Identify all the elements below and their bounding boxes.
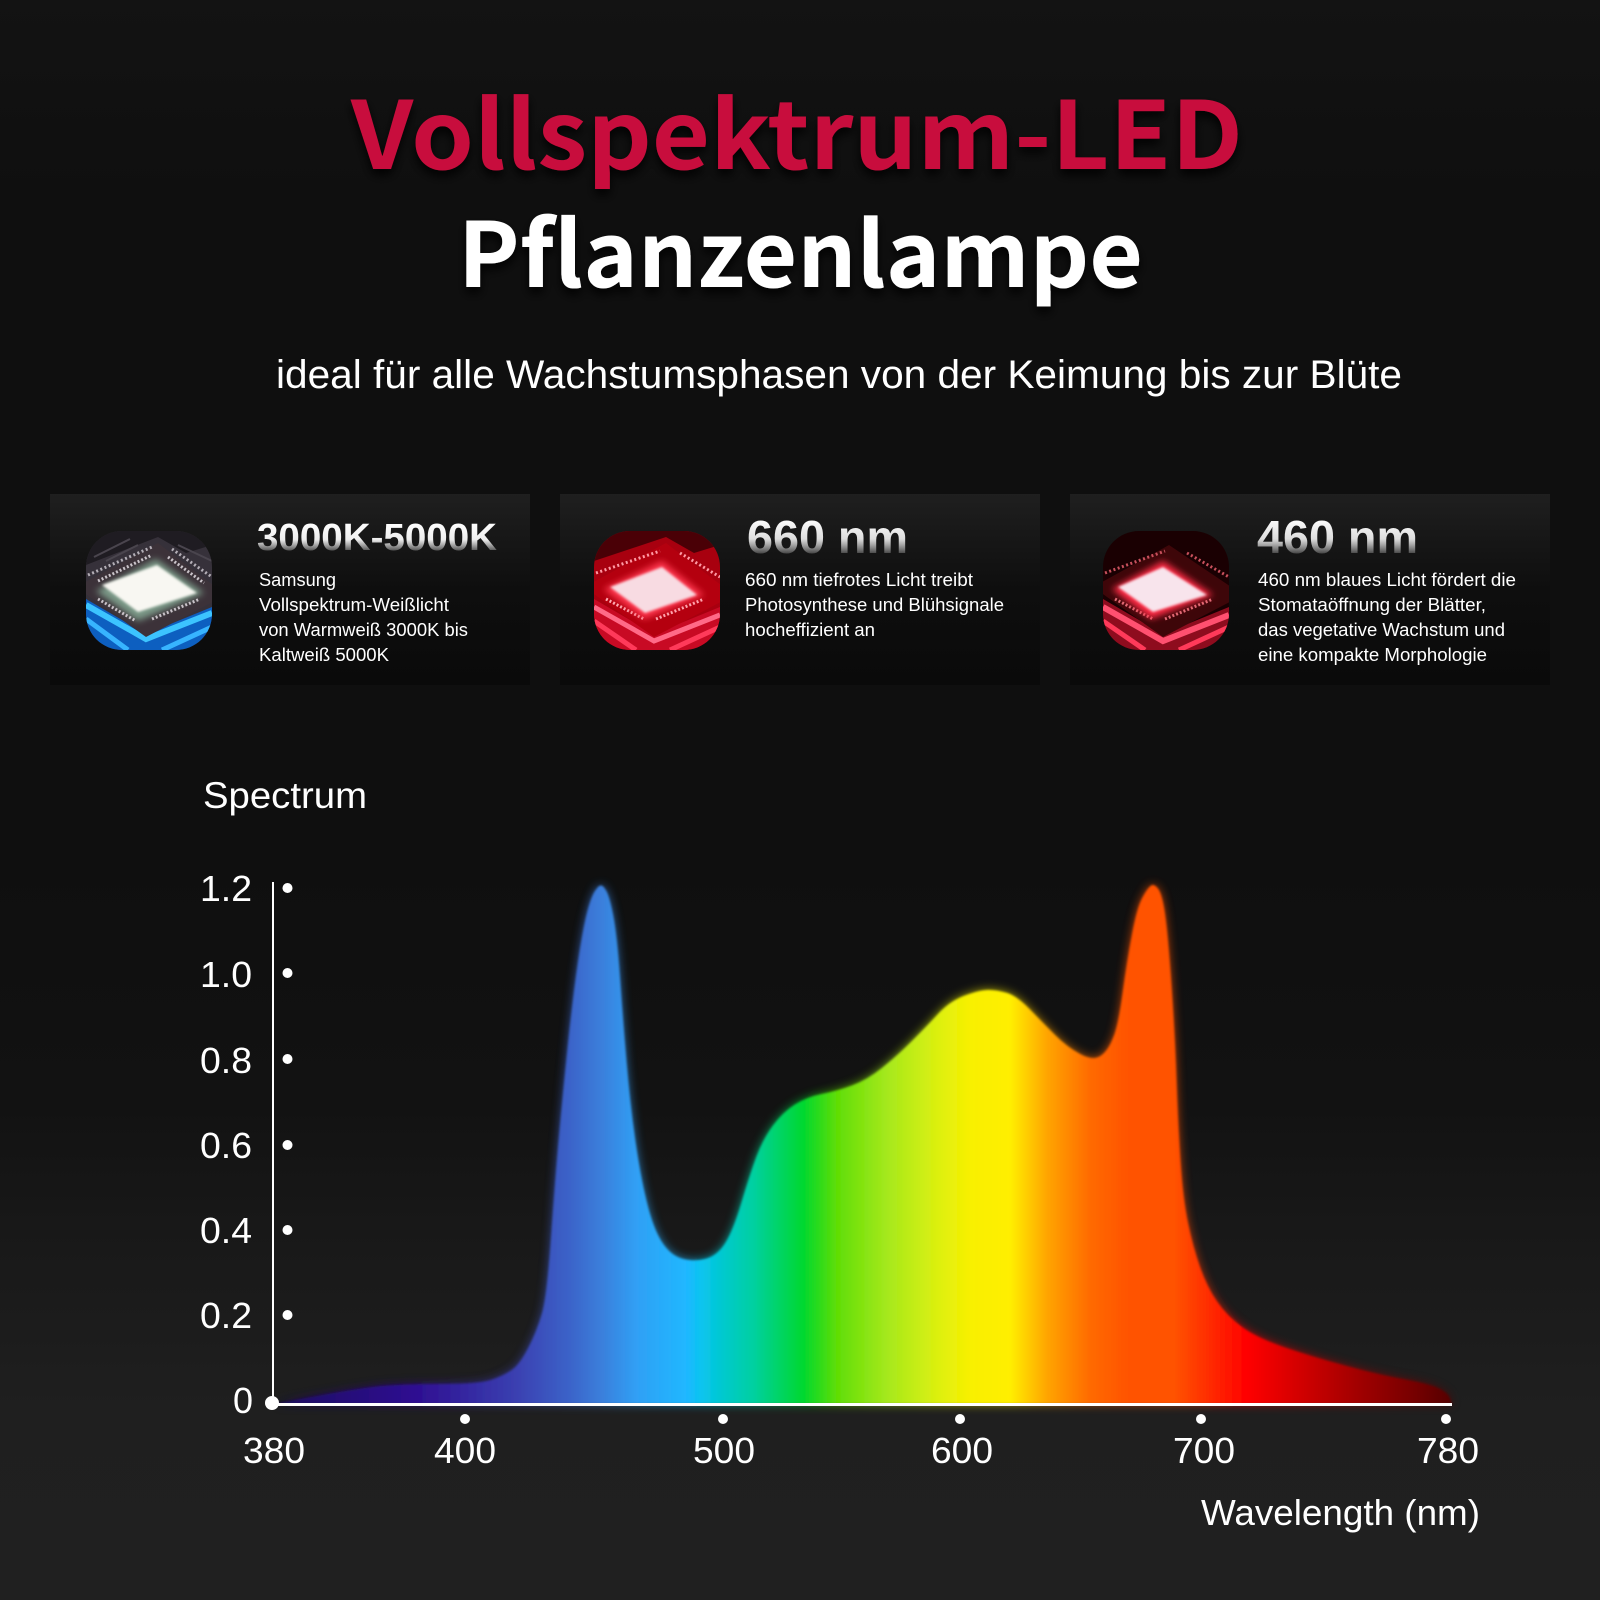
x-axis labels: 400 bbox=[434, 1430, 496, 1471]
spectrum curve bbox=[274, 885, 1452, 1404]
description: Photosynthese und Blühsignale bbox=[745, 594, 1004, 615]
x-axis labels: 700 bbox=[1173, 1430, 1235, 1471]
description: Stomataöffnung der Blätter, bbox=[1258, 594, 1486, 615]
icon: white LED chip bbox=[86, 531, 212, 650]
axes bbox=[265, 882, 1452, 1410]
y-axis labels: 0.8 bbox=[200, 1040, 252, 1081]
heading: 660 nm bbox=[747, 511, 908, 563]
y-axis ticks bbox=[282, 883, 292, 1320]
y-axis title: Spectrum bbox=[203, 775, 367, 816]
x-axis labels: 500 bbox=[693, 1430, 755, 1471]
description: Samsung bbox=[259, 569, 336, 590]
description: das vegetative Wachstum und bbox=[1258, 619, 1505, 640]
description bbox=[259, 569, 468, 665]
description: eine kompakte Morphologie bbox=[1258, 644, 1487, 665]
heading: 3000K-5000K bbox=[257, 517, 498, 559]
description: hocheffizient an bbox=[745, 619, 875, 640]
y-axis labels bbox=[200, 868, 253, 1421]
x-axis ticks bbox=[460, 1414, 1451, 1424]
description bbox=[745, 569, 1004, 640]
y-axis labels: 1.2 bbox=[200, 868, 252, 909]
description: Kaltweiß 5000K bbox=[259, 644, 390, 665]
description: Vollspektrum-Weißlicht bbox=[259, 594, 449, 615]
icon: red-lit LED chip bbox=[1103, 531, 1229, 650]
panel: 3000K-5000K bbox=[50, 494, 530, 661]
title bbox=[350, 61, 1243, 313]
icon: red LED chip bbox=[594, 531, 720, 650]
chart: spectrum bbox=[200, 775, 1480, 1533]
subtitle: ideal für alle Wachstumsphasen von der Keimung bis zur Blüte bbox=[276, 353, 1402, 397]
x-axis labels: 380 bbox=[243, 1430, 305, 1471]
title: Pflanzenlampe bbox=[458, 183, 1143, 313]
description: von Warmweiß 3000K bis bbox=[259, 619, 468, 640]
y-axis labels: 0.2 bbox=[200, 1295, 252, 1336]
x-axis labels: 780 bbox=[1417, 1430, 1479, 1471]
description: 660 nm tiefrotes Licht treibt bbox=[745, 569, 973, 590]
panel: 660 nm bbox=[560, 494, 1040, 650]
description: 460 nm blaues Licht fördert die bbox=[1258, 569, 1516, 590]
x-axis labels: 600 bbox=[931, 1430, 993, 1471]
x-axis labels bbox=[243, 1430, 1479, 1471]
heading: 460 nm bbox=[1257, 511, 1418, 563]
y-axis labels: 0.4 bbox=[200, 1210, 252, 1251]
title: Vollspektrum-LED bbox=[350, 61, 1243, 197]
x-axis title: Wavelength (nm) bbox=[1201, 1492, 1480, 1533]
y-axis labels: 0 bbox=[233, 1380, 253, 1421]
y-axis labels: 0.6 bbox=[200, 1125, 252, 1166]
description bbox=[1258, 569, 1516, 665]
y-axis labels: 1.0 bbox=[200, 954, 252, 995]
panel: 460 nm bbox=[1070, 494, 1550, 665]
